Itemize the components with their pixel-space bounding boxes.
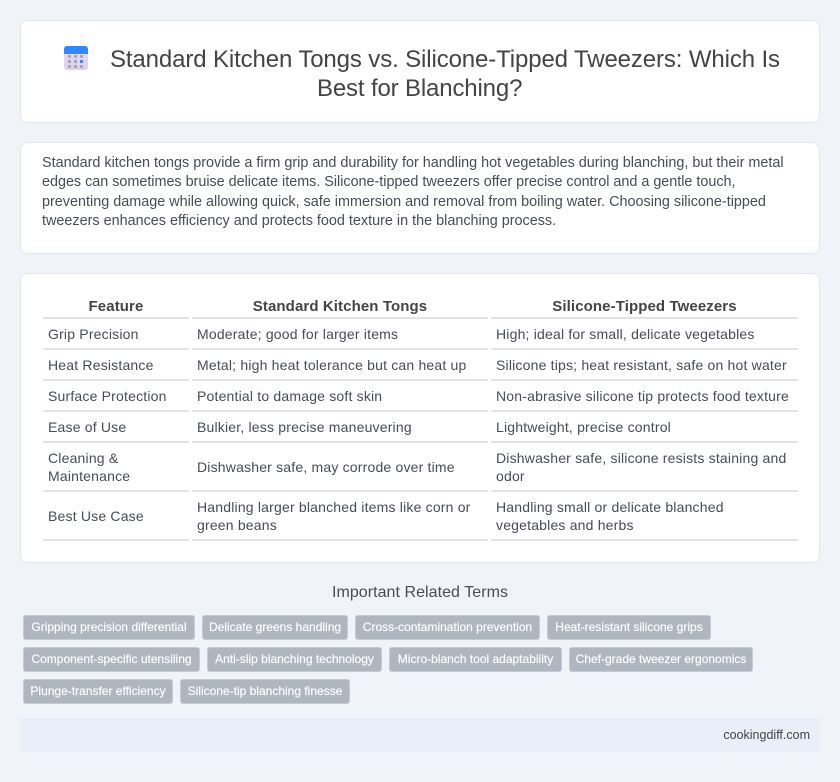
row: best use case: Handling small or delicate blanched bbox=[496, 499, 724, 515]
row: ease of use: Lightweight, precise control bbox=[496, 419, 671, 435]
related terms tags: Micro-blanch tool adaptability bbox=[398, 652, 553, 666]
row: best use case bbox=[48, 499, 724, 533]
row: heat resistance: Silicone tips; heat resistant, safe on hot water bbox=[496, 357, 787, 373]
footer bbox=[20, 718, 820, 752]
related terms tags: Chef-grade tweezer ergonomics bbox=[576, 652, 746, 666]
row: heat resistance: Heat Resistance bbox=[48, 357, 154, 373]
related terms tags: Plunge-transfer efficiency bbox=[30, 684, 166, 698]
title: Best for Blanching? bbox=[317, 75, 522, 102]
row: best use case: green beans bbox=[197, 517, 277, 533]
row: best use case: vegetables and herbs bbox=[496, 517, 634, 533]
icon: calendar bbox=[64, 46, 88, 70]
row: heat resistance: Metal; high heat tolerance but can heat up bbox=[197, 357, 466, 373]
title: Standard Kitchen Tongs vs. Silicone-Tipped Tweezers: Which Is bbox=[110, 46, 780, 73]
comparison table bbox=[43, 298, 798, 541]
row: grip precision bbox=[48, 326, 755, 342]
related terms tags bbox=[23, 615, 753, 704]
related terms tags: Component-specific utensiling bbox=[31, 652, 192, 666]
intro text: preventing damage while allowing quick, safe immersion and removal from boiling water. Choosing silicone-tipped bbox=[42, 194, 766, 210]
footer source text: cookingdiff.com bbox=[723, 728, 810, 742]
row: cleaning and maintenance: Dishwasher safe, silicone resists staining and bbox=[496, 450, 786, 466]
row: surface protection: Potential to damage soft skin bbox=[197, 388, 382, 404]
title card bbox=[20, 20, 820, 123]
related terms tags: Heat-resistant silicone grips bbox=[555, 620, 703, 634]
row: cleaning and maintenance: odor bbox=[496, 468, 525, 484]
intro text bbox=[42, 154, 784, 229]
row: surface protection bbox=[48, 388, 789, 404]
row: cleaning and maintenance bbox=[48, 450, 786, 484]
panel: comparison table bbox=[20, 273, 820, 563]
table header: Standard Kitchen Tongs bbox=[253, 298, 427, 315]
row: ease of use: Bulkier, less precise maneuvering bbox=[197, 419, 412, 435]
row: heat resistance bbox=[48, 357, 787, 373]
row: best use case: Handling larger blanched items like corn or bbox=[197, 499, 471, 515]
row: grip precision: Grip Precision bbox=[48, 326, 139, 342]
intro text: tweezers enhances efficiency and protects food texture in the blanching process. bbox=[42, 213, 556, 229]
row: ease of use: Ease of Use bbox=[48, 419, 126, 435]
row: surface protection: Surface Protection bbox=[48, 388, 167, 404]
row: cleaning and maintenance: Cleaning & bbox=[48, 450, 118, 466]
related terms tags: Anti-slip blanching technology bbox=[215, 652, 374, 666]
intro text: Standard kitchen tongs provide a firm grip and durability for handling hot vegetables during blanching, but their metal bbox=[42, 154, 784, 170]
row: ease of use bbox=[48, 419, 671, 435]
row: grip precision: Moderate; good for larger items bbox=[197, 326, 398, 342]
table header: Silicone-Tipped Tweezers bbox=[552, 298, 737, 315]
row: cleaning and maintenance: Dishwasher safe, may corrode over time bbox=[197, 459, 455, 475]
related terms tags: Cross-contamination prevention bbox=[363, 620, 532, 634]
panel: intro bbox=[20, 142, 820, 254]
related terms tags: Gripping precision differential bbox=[31, 620, 187, 634]
table header bbox=[89, 298, 737, 315]
related terms tags: Delicate greens handling bbox=[209, 620, 341, 634]
intro text: edges can sometimes bruise delicate items. Silicone-tipped tweezers offer precise control and a gentle touch, bbox=[42, 174, 735, 190]
row: surface protection: Non-abrasive silicone tip protects food texture bbox=[496, 388, 789, 404]
table header: Feature bbox=[89, 298, 143, 315]
row: cleaning and maintenance: Maintenance bbox=[48, 468, 130, 484]
title bbox=[110, 46, 780, 102]
related terms tags: Silicone-tip blanching finesse bbox=[188, 684, 342, 698]
row: grip precision: High; ideal for small, delicate vegetables bbox=[496, 326, 755, 342]
row: best use case: Best Use Case bbox=[48, 508, 144, 524]
related terms heading: Important Related Terms bbox=[332, 584, 508, 601]
